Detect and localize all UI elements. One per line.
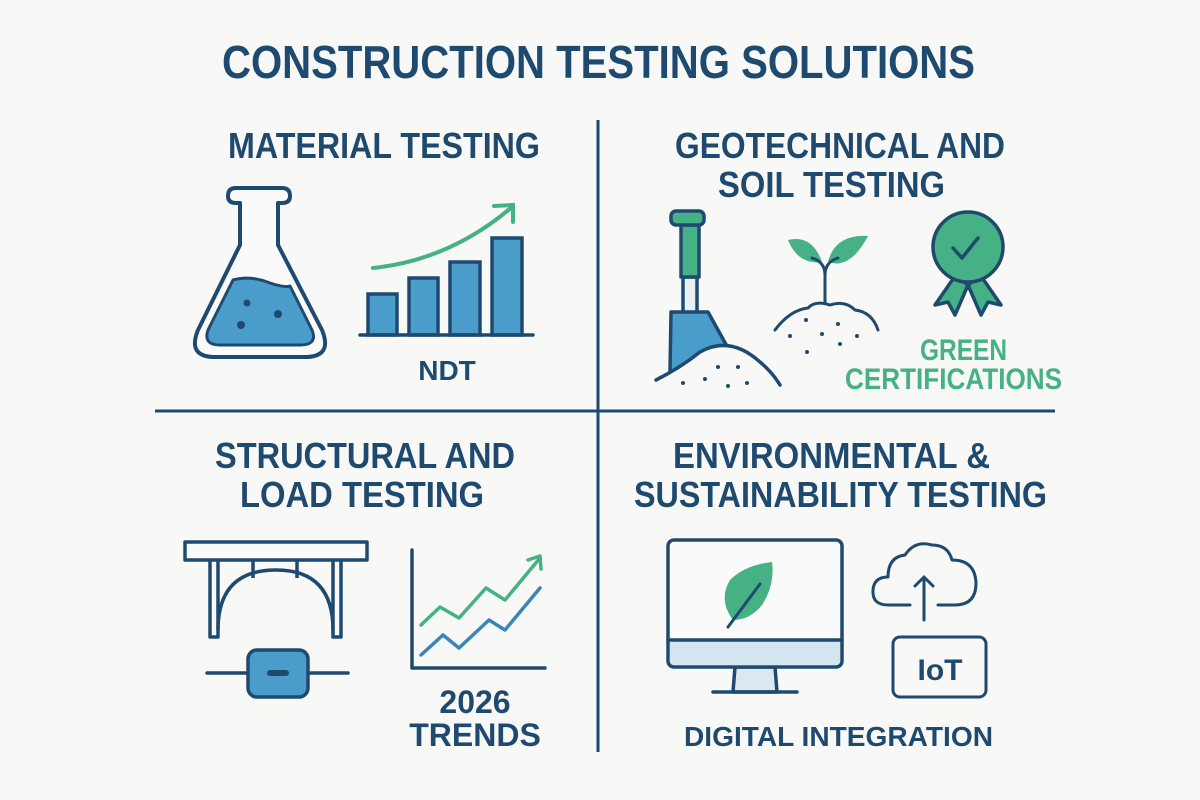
chart: line chart [412, 550, 545, 668]
heading: environmental: ENVIRONMENTAL & [673, 435, 990, 476]
icon: monitor [668, 540, 842, 692]
icon: bridge [185, 542, 367, 637]
heading: geotechnical [675, 125, 1005, 205]
heading: structural: STRUCTURAL AND [215, 435, 515, 476]
icon: shovel [656, 211, 780, 388]
chart: bar chart [360, 205, 533, 335]
heading: geotechnical: GEOTECHNICAL AND [675, 125, 1005, 166]
label: 2026 trends: 2026 [439, 684, 511, 720]
label: green certifications: GREEN [920, 334, 1007, 367]
panel: material testing [195, 125, 540, 386]
icon: IoT [893, 637, 986, 697]
label: digital integration: DIGITAL INTEGRATION [684, 721, 993, 752]
heading: structural [215, 435, 515, 515]
label: green certifications [845, 334, 1062, 396]
heading: material testing: MATERIAL TESTING [228, 125, 540, 166]
label: 2026 trends: TRENDS [409, 717, 541, 753]
heading: geotechnical: SOIL TESTING [718, 164, 945, 205]
panel: geotechnical [656, 125, 1062, 396]
icon: cloud upload [873, 544, 976, 620]
label: 2026 trends [409, 684, 541, 753]
icon: sprout [775, 236, 878, 354]
title: CONSTRUCTION TESTING SOLUTIONS [222, 36, 975, 88]
label: NDT: NDT [418, 355, 476, 386]
icon: IoT: IoT [918, 654, 962, 687]
label: green certifications: CERTIFICATIONS [845, 363, 1062, 396]
icon: sensor [207, 650, 348, 697]
heading: environmental [634, 435, 1047, 515]
heading: structural: LOAD TESTING [240, 474, 484, 515]
icon: flask [195, 188, 325, 357]
heading: environmental: SUSTAINABILITY TESTING [634, 474, 1047, 515]
icon: badge [933, 212, 1003, 315]
panel: environmental [634, 435, 1047, 752]
panel: structural [185, 435, 545, 753]
